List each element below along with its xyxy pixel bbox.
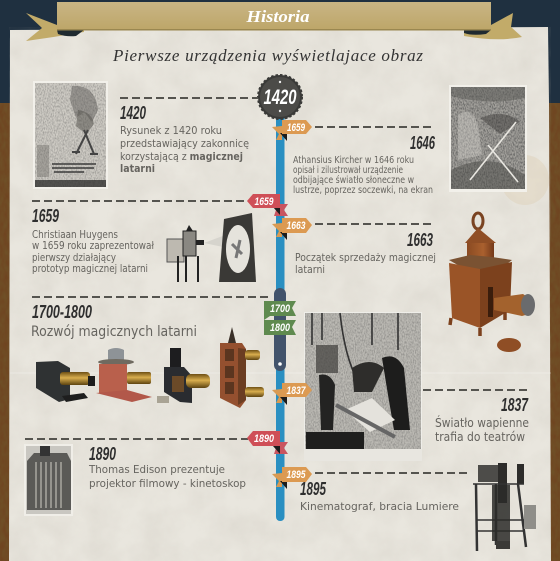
timeline bar bbox=[274, 110, 286, 521]
tag: green 1800 bbox=[264, 320, 296, 335]
tag: green 1800: 1800 bbox=[270, 322, 291, 334]
event: 1890: 1890 bbox=[89, 444, 116, 464]
event: 1646: 1646 bbox=[410, 133, 436, 153]
event: 1420: przedstawiający zakonnicę bbox=[120, 137, 249, 150]
event: 1895: Kinematograf, bracia Lumiere bbox=[300, 500, 459, 513]
tag: orange 1659 bbox=[272, 120, 312, 141]
event: 1659: prototyp magicznej latarni bbox=[32, 263, 148, 275]
illustration: dark lantern with brass lens bbox=[157, 348, 210, 403]
heading: Pierwsze urządzenia wyświetlajace obraz bbox=[112, 46, 423, 65]
tag: orange 1659: 1659 bbox=[287, 122, 306, 134]
event: 1659: w 1659 roku zaprezentował bbox=[32, 240, 154, 252]
event: 1700-1800 bbox=[31, 297, 270, 408]
event: 1420: latarni bbox=[120, 162, 155, 175]
event: 1659: pierwszy działający bbox=[32, 252, 116, 264]
illustration: triple-lens lantern bbox=[220, 327, 264, 408]
tag: orange 1663: 1663 bbox=[286, 220, 306, 232]
photo: kinetoscope bbox=[24, 444, 73, 516]
illustration: copper magic lantern bbox=[449, 213, 535, 352]
event: 1659: 1659 bbox=[32, 206, 59, 226]
tag: red 1890 bbox=[247, 431, 288, 454]
event: 1663: latarni bbox=[295, 263, 325, 276]
event: 1659 bbox=[32, 201, 256, 282]
tag: red 1659: 1659 bbox=[254, 196, 274, 208]
event: 1420 bbox=[33, 81, 258, 189]
event: 1837: 1837 bbox=[501, 395, 529, 415]
title text: Historia bbox=[245, 7, 310, 26]
photo: monk drawing bbox=[33, 81, 108, 189]
event: 1659: Christiaan Huygens bbox=[32, 229, 118, 241]
event: 1837: Światło wapienne bbox=[435, 415, 529, 430]
lid bbox=[497, 338, 521, 352]
tag: red 1659 bbox=[247, 194, 288, 216]
event: 1646: opisał i zilustrował urządzenie bbox=[293, 165, 403, 176]
illustration: red lantern bbox=[96, 348, 152, 402]
badge: 1420 bbox=[258, 75, 302, 119]
event: 1420: korzystającą z magicznej bbox=[120, 150, 243, 163]
tag: green 1700: 1700 bbox=[270, 303, 291, 315]
badge: 1420: 1420 bbox=[264, 86, 297, 109]
illustration: black lantern bbox=[36, 361, 95, 402]
title ribbon bbox=[26, 2, 522, 41]
illustration: lantern projecting on a screen bbox=[167, 213, 256, 282]
illustration: cinematograph on stand bbox=[473, 463, 536, 551]
event: 1420: 1420 bbox=[120, 103, 146, 123]
tag: red 1890: 1890 bbox=[254, 433, 275, 445]
event: 1890: projektor filmowy - kinetoskop bbox=[89, 477, 246, 490]
photo: Kircher engraving bbox=[449, 85, 527, 192]
event: 1646: odbijające światło słoneczne w bbox=[293, 175, 414, 186]
event: 1663: Początek sprzedaży magicznej bbox=[295, 251, 436, 264]
event: 1837: trafia do teatrów bbox=[435, 430, 525, 444]
tag: orange 1663 bbox=[272, 218, 312, 240]
tag: orange 1837: 1837 bbox=[286, 385, 306, 397]
event: 1646: lustrze, poprzez soczewki, na ekran bbox=[293, 185, 433, 196]
event: 1895: 1895 bbox=[300, 479, 327, 499]
event: 1895 bbox=[300, 463, 536, 551]
event: 1646 bbox=[293, 85, 527, 196]
event: 1420: Rysunek z 1420 roku bbox=[120, 124, 222, 137]
event: 1890: Thomas Edison prezentuje bbox=[88, 463, 225, 476]
event: 1663 bbox=[295, 213, 535, 352]
event: 1646: Athansius Kircher w 1646 roku bbox=[293, 155, 414, 166]
tag: orange 1895: 1895 bbox=[286, 469, 306, 481]
illustration: theatre engraving bbox=[304, 312, 422, 461]
event: 1837 bbox=[304, 312, 529, 461]
tag: orange 1895 bbox=[272, 467, 312, 489]
tag: green 1700 bbox=[264, 301, 296, 320]
event: 1700-1800: 1700-1800 bbox=[32, 302, 92, 322]
event: 1890 bbox=[24, 439, 248, 516]
event: 1700-1800: Rozwój magicznych latarni bbox=[31, 324, 197, 340]
tag: orange 1837 bbox=[272, 383, 312, 405]
event: 1663: 1663 bbox=[407, 230, 433, 250]
